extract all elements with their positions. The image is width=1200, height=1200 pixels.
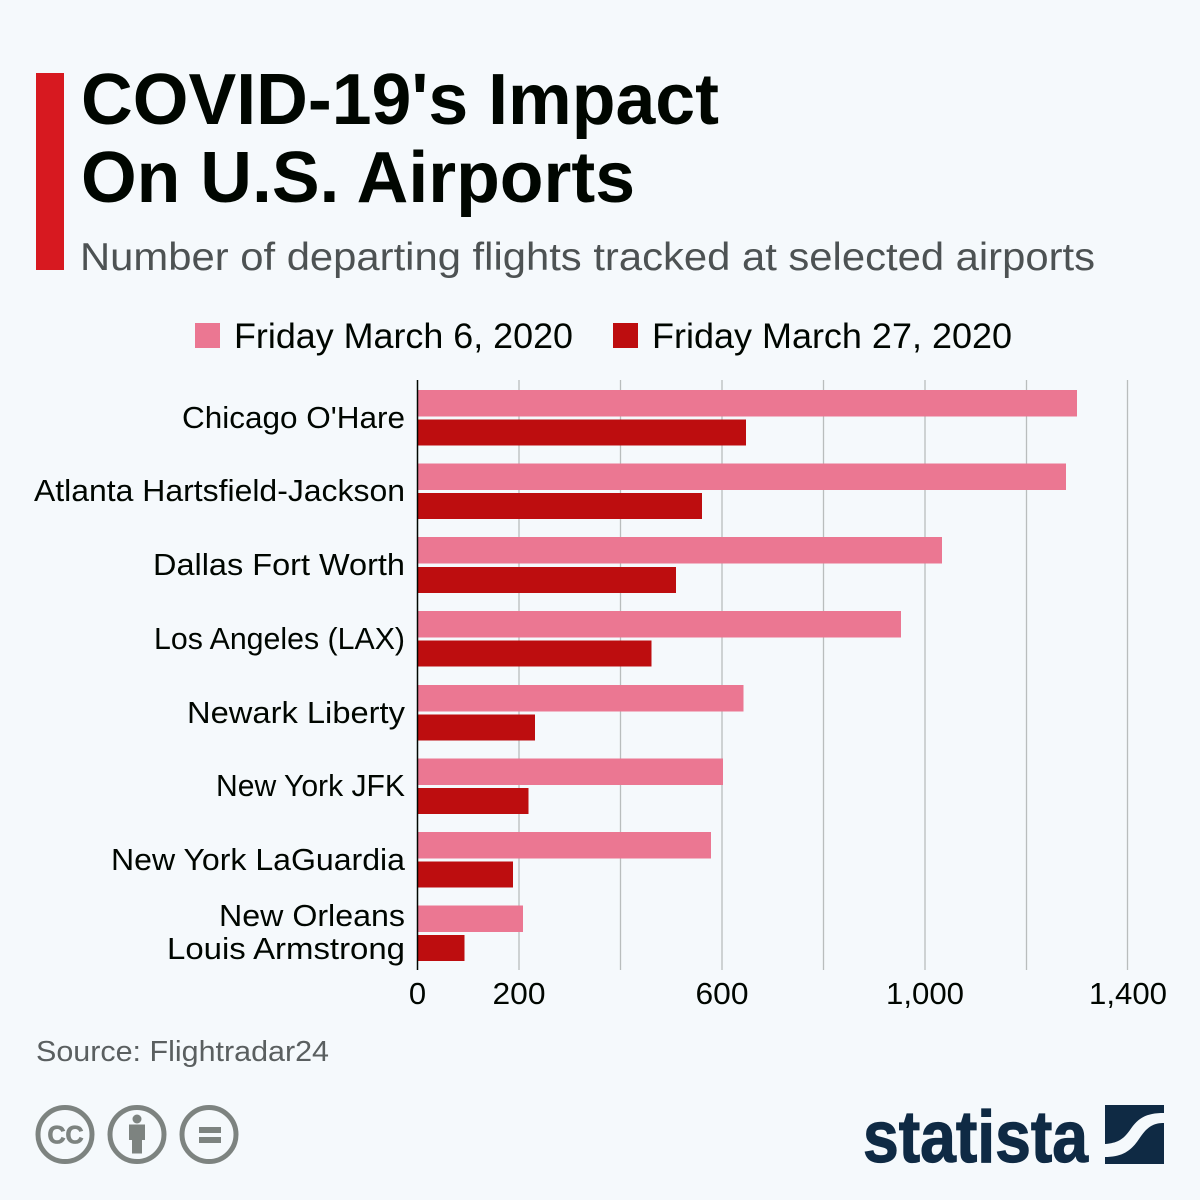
- category labels: Atlanta Hartsfield-Jackson: [34, 473, 405, 508]
- title: [81, 60, 719, 218]
- icon: creative commons: [38, 1108, 92, 1162]
- category labels: Louis Armstrong: [167, 931, 405, 966]
- axis value labels: 200: [492, 976, 546, 1011]
- title: On U.S. Airports: [81, 138, 635, 218]
- statista logo: [863, 1097, 1164, 1178]
- axis value labels: 1,000: [886, 976, 964, 1011]
- category labels: New York JFK: [216, 768, 405, 803]
- category labels: Dallas Fort Worth: [153, 547, 405, 582]
- statista icon: [1105, 1105, 1164, 1164]
- category labels: New Orleans: [219, 898, 405, 933]
- legend: Friday March 27, 2020: [652, 317, 1012, 356]
- category labels: New York LaGuardia: [111, 842, 406, 877]
- title accent bar: [36, 73, 64, 270]
- bars: Los Angeles (LAX): [418, 611, 901, 666]
- grid lines: [519, 380, 1128, 970]
- subtitle: Number of departing flights tracked at selected airports: [80, 236, 1095, 279]
- legend: Friday March 6, 2020: [234, 317, 573, 356]
- legend: [195, 317, 1012, 356]
- axis value labels: [409, 976, 1167, 1011]
- bars: Chicago O'Hare: [418, 390, 1077, 446]
- bars: New York JFK: [418, 758, 723, 814]
- vertical axis: [416, 380, 418, 970]
- title: COVID-19's Impact: [81, 60, 719, 140]
- statista wordmark: statista: [863, 1097, 1089, 1178]
- bars: New Orleans Louis Armstrong: [418, 906, 523, 961]
- axis value labels: 600: [696, 976, 748, 1011]
- axis value labels: 1,400: [1089, 976, 1167, 1011]
- icon: creative commons: CC: [48, 1122, 84, 1150]
- category labels: Los Angeles (LAX): [154, 621, 405, 656]
- icon: attribution: [110, 1108, 164, 1162]
- bars: New York LaGuardia: [418, 832, 711, 888]
- bars: Newark Liberty: [418, 685, 744, 740]
- axis value labels: 0: [409, 976, 426, 1011]
- icon: no derivatives: [182, 1108, 236, 1162]
- bar chart: [418, 390, 1077, 961]
- bars: Atlanta Hartsfield-Jackson: [418, 464, 1066, 519]
- category labels: Chicago O'Hare: [182, 400, 405, 435]
- bars: Dallas Fort Worth: [418, 537, 942, 593]
- category labels: [34, 400, 406, 966]
- source: Source: Flightradar24: [36, 1036, 329, 1068]
- category labels: Newark Liberty: [187, 695, 406, 730]
